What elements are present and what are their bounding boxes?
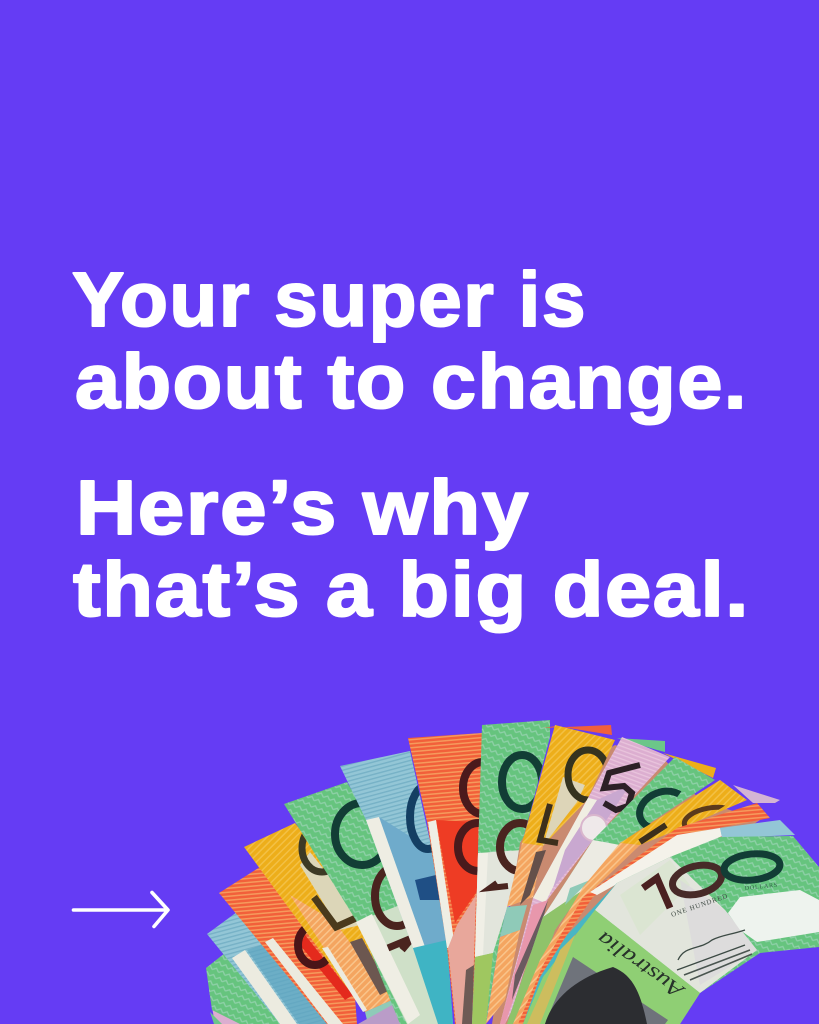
note: red left xyxy=(219,867,357,1024)
signature xyxy=(677,930,745,970)
note: yellow right xyxy=(513,780,747,1024)
note: green fourth xyxy=(507,757,715,1024)
caption dollars: DOLLARS xyxy=(745,883,778,892)
note: red xyxy=(408,733,482,1024)
note: yellow left xyxy=(244,823,402,1024)
digit 1 xyxy=(643,878,670,908)
note: red thin xyxy=(518,803,770,1024)
digit 0 brown xyxy=(669,860,725,900)
note: blue left xyxy=(207,912,330,1024)
heading line 4: that’s a big deal. xyxy=(73,547,750,633)
note: yellow 50 xyxy=(486,725,615,1024)
heading line 1: Your super is xyxy=(72,257,587,343)
portrait window xyxy=(545,957,668,1024)
digit 0 green xyxy=(723,851,781,883)
note: blue xyxy=(340,751,453,1024)
portrait hair xyxy=(545,967,647,1024)
centre pale band xyxy=(595,857,757,993)
fine print xyxy=(684,950,752,980)
heading line 2: about to change. xyxy=(75,339,748,425)
fan backing under the inner notes xyxy=(492,745,760,1024)
heading line 3: Here’s why xyxy=(76,465,530,551)
left yellow-green panel xyxy=(523,910,700,1024)
note: pink 5 xyxy=(500,737,670,1024)
note: 100 dollars front xyxy=(523,836,819,1024)
note: green third xyxy=(472,720,550,1024)
note: pink far left xyxy=(209,985,240,1024)
note: green far left xyxy=(206,953,285,1024)
white window xyxy=(728,890,819,942)
Australia script: Australia xyxy=(592,927,690,1005)
title xyxy=(72,257,750,633)
note: green 100 second xyxy=(284,782,445,1024)
banknote fan xyxy=(206,720,819,1024)
note: blue thin xyxy=(523,820,795,1024)
caption: ONE HUNDRED xyxy=(670,892,729,919)
arrow xyxy=(74,892,168,926)
back slivers of notes xyxy=(543,725,819,875)
